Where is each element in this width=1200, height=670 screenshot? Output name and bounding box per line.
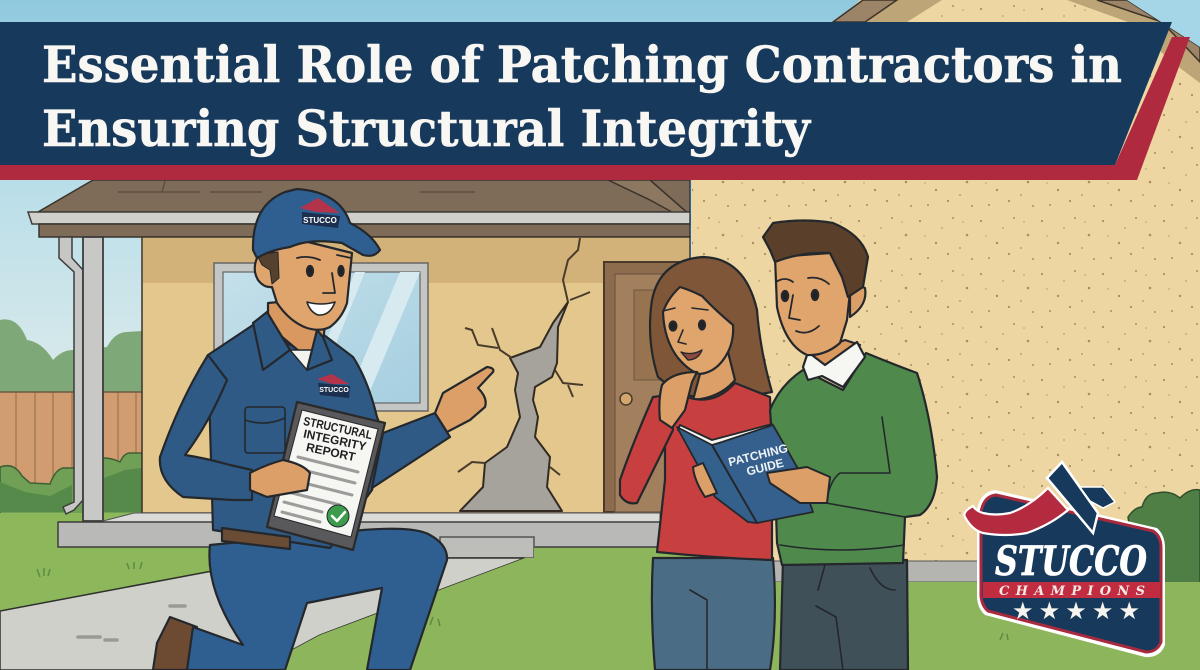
belt [222,528,290,549]
face [663,287,733,374]
shirt logo [317,374,350,398]
tablet report: REPORT [305,440,357,464]
neck and face [268,300,325,352]
background trees [0,319,142,394]
dark trousers [780,560,908,670]
white undershirt [290,350,313,370]
porch slab [58,513,660,558]
face [775,253,850,355]
wooden fence [0,392,142,484]
cap logo [300,198,340,228]
raised arm [620,395,673,503]
shirt pocket [245,407,285,453]
house front wall [142,237,690,513]
white shirt collar [803,342,865,387]
jeans seam [690,590,707,670]
man facial features [776,278,829,333]
title line 2: Ensuring Structural Integrity [42,99,812,158]
shrub right [1128,490,1200,597]
foundation strip right [772,561,1012,582]
logo wordmark: STUCCO [995,538,1147,585]
champions text: CHAMPIONS [999,584,1145,599]
pointing hand [435,367,493,432]
lawn [0,513,1200,670]
ball cap [253,189,380,258]
title banner [0,22,1190,180]
roof left rafters [833,0,942,22]
near arm [160,355,252,500]
contractor figure [153,189,493,670]
shirt logo: STUCCO [319,387,349,394]
tablet report [267,402,385,550]
cap logo: STUCCO [303,216,337,225]
trousers [187,529,447,670]
house stucco wall right with roof above [692,0,1200,562]
trowel [1047,462,1115,533]
pavement marks [78,606,185,640]
long hair [650,257,772,400]
Stucco Champions logo [964,462,1165,657]
hand holding tablet [250,460,310,497]
porch post [83,237,103,521]
hedge [0,453,142,514]
window [214,263,428,411]
structural crack in wall [458,238,590,511]
tablet report: INTEGRITY [302,427,368,454]
red ribbon [983,582,1160,598]
downspout [59,237,83,514]
door [604,262,690,512]
title line 1: Essential Role of Patching Contractors in [42,35,1122,94]
shirt collar [253,312,332,370]
hair side [257,252,279,284]
roof right rafters [1067,0,1200,83]
jeans [652,558,775,670]
ear [850,287,865,317]
wall shadow below eave [143,238,689,283]
lawn right front [255,548,1200,670]
sweater folds [780,417,905,550]
hands holding book [693,463,830,503]
torso work shirt [208,325,383,548]
book title: PATCHING [727,441,789,469]
face [255,240,352,330]
woman figure [620,257,775,670]
red swoosh [964,488,1068,535]
badge body [981,495,1161,652]
porch roof [28,180,690,237]
open book patching guide [677,424,813,523]
face features [297,255,351,315]
boot [153,617,197,670]
trouser seams [816,565,895,670]
man in green figure [763,220,937,670]
neck [808,340,860,375]
sky background [0,0,1200,400]
green sweater [770,353,937,565]
badge outline [977,490,1165,657]
hair [763,220,868,297]
far arm [372,413,450,488]
red sweater [657,383,772,560]
five stars: ★★★★★ [1012,597,1140,625]
hand at chin [659,372,697,428]
walkway [0,558,525,670]
tablet report: STRUCTURAL [302,414,374,442]
banner red accent [0,37,1190,180]
grass tufts [37,562,1008,640]
neck [693,352,735,400]
book title: GUIDE [745,456,785,479]
woman facial features [663,308,708,360]
banner navy [0,22,1172,165]
